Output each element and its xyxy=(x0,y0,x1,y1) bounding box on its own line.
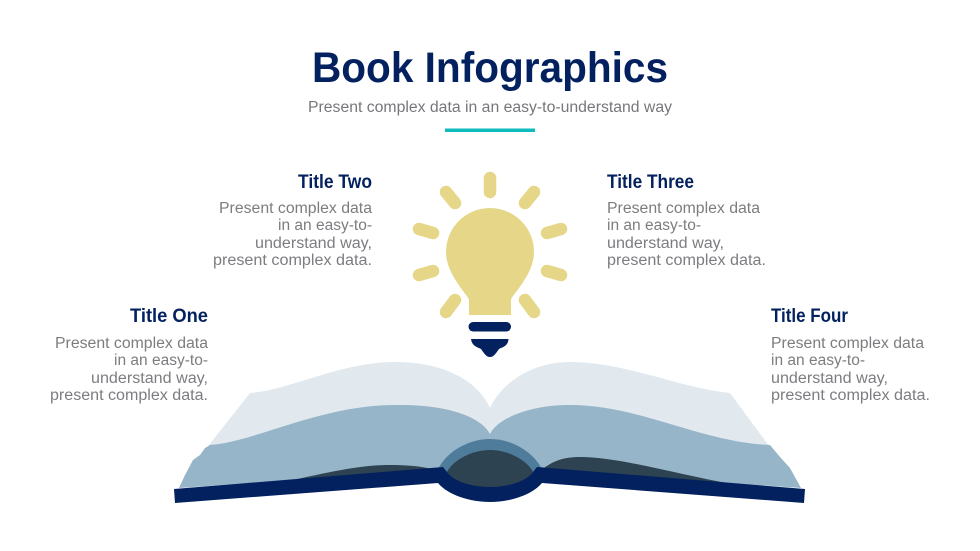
text block: title four: Present complex data xyxy=(771,335,924,352)
title accent line xyxy=(445,128,535,132)
text block: title two: understand way, xyxy=(255,235,372,252)
text block: title two: present complex data. xyxy=(213,252,372,269)
light top pages xyxy=(205,362,772,460)
text block: title three xyxy=(607,172,766,269)
subtitle: Present complex data in an easy-to-understand way xyxy=(308,99,672,116)
bulb rays xyxy=(419,178,561,312)
text block: title three: understand way, xyxy=(607,235,724,252)
text block: title four: Title Four xyxy=(771,306,849,327)
text block: title three: present complex data. xyxy=(607,252,766,269)
text block: title three: Title Three xyxy=(607,172,694,193)
title: Book Infographics xyxy=(312,44,668,92)
spine hollow xyxy=(447,450,533,489)
mid page stack xyxy=(179,405,801,488)
text block: title one xyxy=(50,306,208,404)
icon: open book xyxy=(174,362,805,503)
text block: title three: in an easy-to- xyxy=(607,217,701,234)
icon: light bulb xyxy=(419,178,561,357)
text block: title four xyxy=(771,306,930,404)
text block: title one: in an easy-to- xyxy=(114,352,208,369)
text block: title four: understand way, xyxy=(771,370,888,387)
dark left inner page xyxy=(293,465,432,480)
text block: title one: present complex data. xyxy=(50,387,208,404)
text block: title two: Title Two xyxy=(298,172,372,193)
bulb glass xyxy=(446,208,534,315)
spine ring xyxy=(438,439,542,490)
navy book cover xyxy=(174,467,805,503)
text block: title four: in an easy-to- xyxy=(771,352,865,369)
text block: title three: Present complex data xyxy=(607,200,760,217)
bulb base bar xyxy=(468,322,511,332)
text block: title two: Present complex data xyxy=(219,200,372,217)
text block: title four: present complex data. xyxy=(771,387,930,404)
text block: title one: Title One xyxy=(130,306,208,327)
bulb base cap xyxy=(471,339,508,357)
text block: title two xyxy=(213,172,372,269)
text block: title one: Present complex data xyxy=(55,335,208,352)
text block: title one: understand way, xyxy=(91,370,208,387)
text block: title two: in an easy-to- xyxy=(278,217,372,234)
dark right inner page xyxy=(540,457,732,484)
